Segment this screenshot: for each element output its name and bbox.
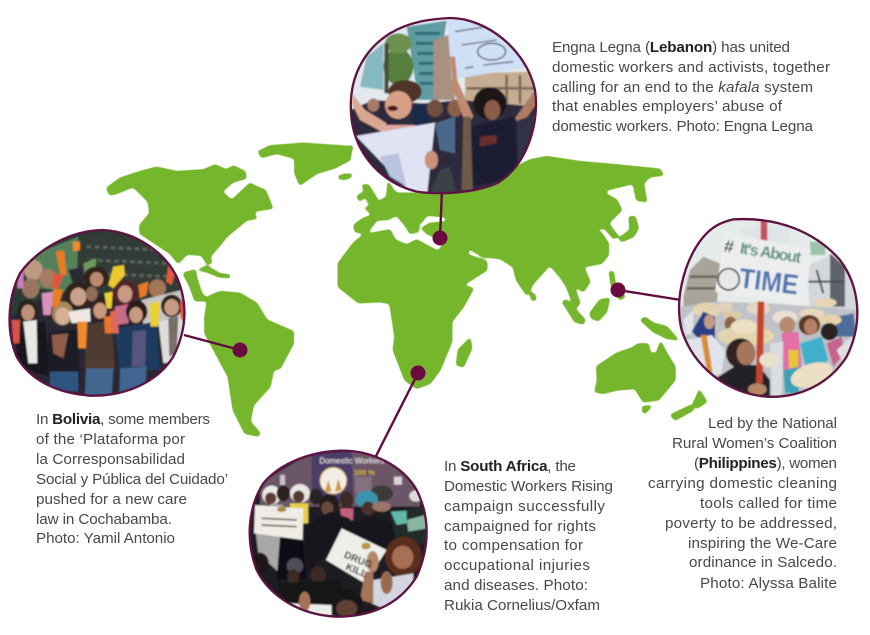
text: South Africa caption: to compensation for: [444, 537, 583, 554]
text: South Africa caption: Domestic Workers Rising: [444, 478, 613, 495]
text: Philippines caption: (Philippines), women: [694, 455, 837, 472]
text: Bolivia caption: la Corresponsabilidad: [36, 451, 185, 468]
connector: South Africa: [375, 366, 426, 458]
photo: Philippines It's About Time march: [678, 218, 858, 398]
text: Bolivia caption: Photo: Yamil Antonio: [36, 530, 175, 547]
text: Philippines caption: carrying domestic cleaning: [648, 475, 837, 492]
connector: Lebanon: [432, 190, 448, 246]
text: South Africa caption: [444, 458, 613, 614]
text: Bolivia caption: Social y Pública del Cuidado’: [36, 471, 228, 488]
text: Bolivia caption: of the ‘Plataforma por: [36, 431, 185, 448]
text: Bolivia caption: In Bolivia, some members: [36, 411, 210, 428]
photo: Philippines It's About Time march: #: [723, 236, 735, 257]
photo: South Africa Domestic Workers Rising: Domestic Workers: [319, 456, 384, 465]
text: Philippines caption: poverty to be addressed,: [665, 515, 837, 532]
text: South Africa caption: Rukia Cornelius/Oxfam: [444, 597, 600, 614]
text: Lebanon caption: [552, 39, 830, 135]
photo: South Africa Domestic Workers Rising: KILL: [344, 562, 369, 580]
connector: Bolivia: [184, 335, 248, 358]
text: Lebanon caption: calling for an end to the kafala system: [552, 79, 813, 96]
text: Philippines caption: Photo: Alyssa Balite: [700, 575, 837, 592]
text: Philippines caption: Rural Women’s Coalition: [672, 435, 837, 452]
text: Lebanon caption: domestic workers and activists, together: [552, 59, 830, 76]
text: South Africa caption: campaigned for rights: [444, 518, 596, 535]
text: Lebanon caption: domestic workers. Photo: Engna Legna: [552, 118, 814, 135]
text: South Africa caption: In South Africa, the: [444, 458, 576, 475]
connector: Philippines: [610, 282, 681, 300]
photo: South Africa Domestic Workers Rising: 100 %: [354, 468, 375, 477]
photo: Lebanon protest: [350, 16, 538, 194]
text: Philippines caption: ordinance in Salcedo.: [689, 554, 837, 571]
text: South Africa caption: campaign successfully: [444, 498, 605, 515]
text: Philippines caption: Led by the National: [708, 415, 837, 432]
map: the Americas: [107, 143, 352, 436]
text: South Africa caption: and diseases. Photo:: [444, 577, 588, 594]
photo: Philippines It's About Time march: TIME: [738, 263, 800, 301]
text: Philippines caption: tools called for time: [700, 495, 837, 512]
text: Bolivia caption: law in Cochabamba.: [36, 511, 172, 528]
text: South Africa caption: occupational injuries: [444, 557, 590, 574]
photo: Philippines It's About Time march: It's About: [739, 240, 803, 267]
text: Philippines caption: inspiring the We-Care: [688, 535, 837, 552]
text: Bolivia caption: [36, 411, 228, 547]
map: Europe, Asia, Africa and Oceania: [330, 146, 707, 420]
text: Bolivia caption: pushed for a new care: [36, 491, 187, 508]
text: Lebanon caption: that enables employers’ abuse of: [552, 98, 783, 115]
photo: South Africa Domestic Workers Rising: [248, 450, 428, 618]
world map: [107, 143, 707, 436]
text: Lebanon caption: Engna Legna (Lebanon) has united: [552, 39, 790, 56]
photo: South Africa Domestic Workers Rising: DRUG: [342, 550, 374, 571]
text: Philippines caption: [648, 415, 837, 592]
photo: Bolivia group with rubber gloves: [8, 228, 186, 397]
